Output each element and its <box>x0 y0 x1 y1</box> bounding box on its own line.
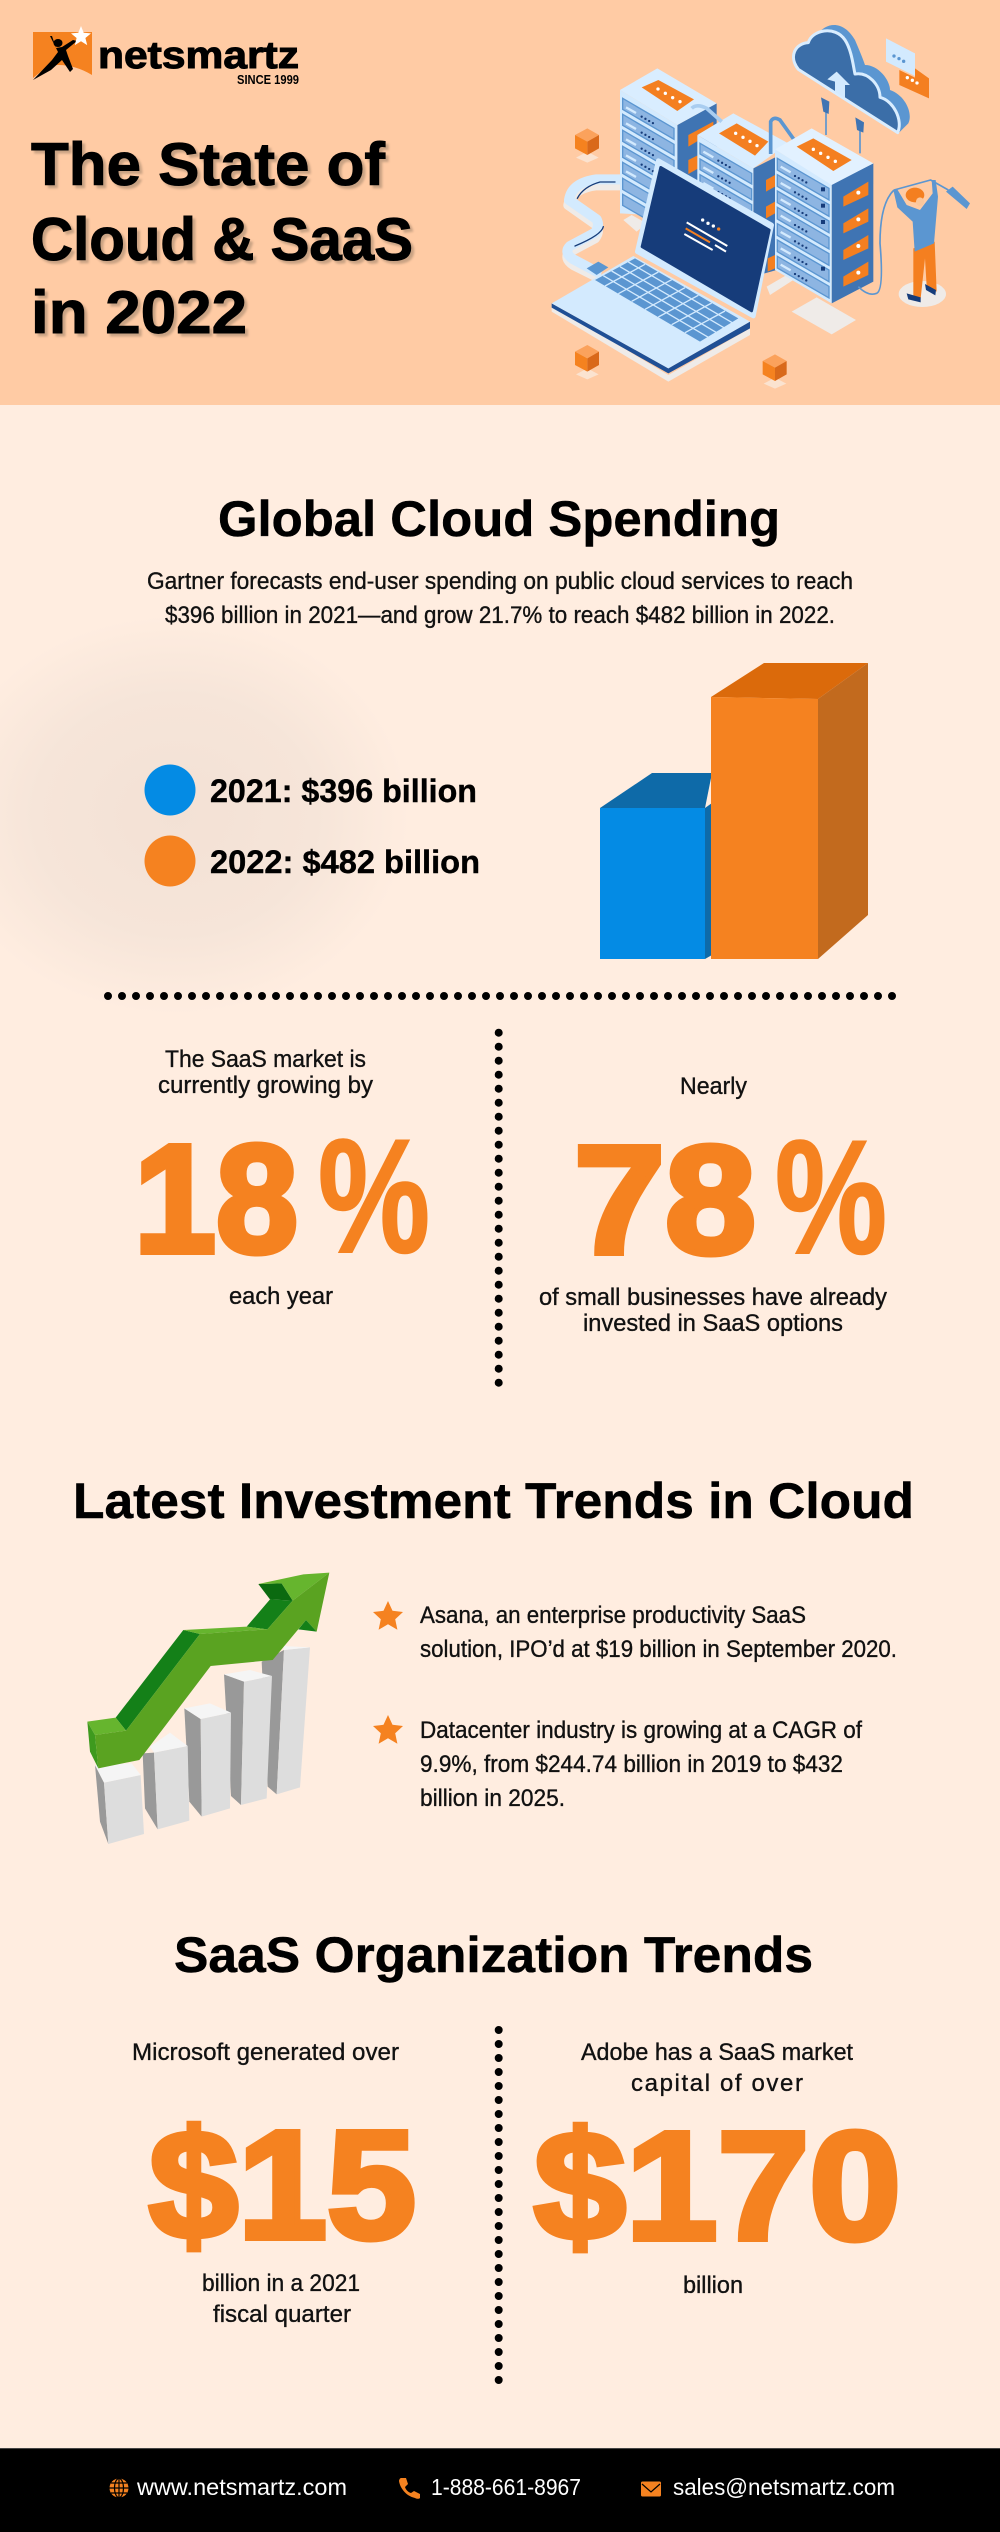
stat: 18 percent growth: currently growing by <box>158 1072 373 1099</box>
text: gartner forecast: Gartner forecasts end-user spending on public cloud services to reach <box>147 568 853 595</box>
stat: adobe <box>534 2039 901 2299</box>
technician with cable <box>858 180 970 302</box>
stat: 78 percent small businesses <box>539 1073 887 1337</box>
bullet: asana <box>373 1601 897 1663</box>
server rack: front <box>775 128 873 303</box>
stat: 18 percent growth <box>134 1046 430 1310</box>
panel: saas statistics <box>134 1033 887 1384</box>
stat: adobe: $170 <box>534 2100 901 2272</box>
contact: email: sales@netsmartz.com <box>673 2474 895 2500</box>
legend: spending by year <box>144 764 480 886</box>
legend: spending by year: 2022: $482 billion <box>210 844 480 880</box>
title: in 2022 <box>31 279 247 346</box>
text: gartner forecast: $396 billion in 2021—and grow 21.7% to reach $482 billion in 2022. <box>165 602 835 629</box>
bullet: datacenter <box>373 1715 862 1812</box>
stat: microsoft <box>132 2039 416 2328</box>
server rack: back left <box>620 68 717 219</box>
stat: 78 percent small businesses: invested in SaaS options <box>583 1310 843 1337</box>
stat: microsoft: billion in a 2021 <box>202 2270 360 2297</box>
bullet: asana: Asana, an enterprise productivity SaaS <box>420 1602 806 1629</box>
title <box>31 131 413 346</box>
icon: cubes <box>575 128 787 389</box>
stat: 18 percent growth: 18 <box>134 1113 298 1285</box>
panel: saas organization trends <box>132 1927 901 2381</box>
server rack: middle <box>697 113 788 277</box>
heading: saas organization trends: SaaS Organization Trends <box>174 1927 813 1983</box>
bar chart: 3d spending bars <box>600 663 868 959</box>
title: The State of <box>31 131 386 198</box>
chart icon: rising green arrow over bars <box>87 1573 329 1844</box>
heading: global cloud spending: Global Cloud Spending <box>218 491 780 547</box>
logo: SINCE 1999 <box>237 72 299 87</box>
stat: 18 percent growth: each year <box>229 1283 333 1310</box>
heading: latest investment trends: Latest Investment Trends in Cloud <box>73 1473 914 1529</box>
stat: adobe: Adobe has a SaaS market <box>581 2039 853 2066</box>
stat: 78 percent small businesses: % <box>775 1107 887 1288</box>
legend: spending by year: 2021: $396 billion <box>210 773 477 809</box>
stat: microsoft: fiscal quarter <box>213 2301 351 2328</box>
stat: microsoft: Microsoft generated over <box>132 2039 399 2066</box>
cable: left <box>567 179 620 277</box>
stat: 18 percent growth: % <box>318 1106 430 1287</box>
background glow <box>0 615 410 1015</box>
cables: rack links <box>692 106 797 154</box>
stat: adobe: billion <box>683 2272 743 2299</box>
bullet: datacenter: billion in 2025. <box>420 1785 565 1812</box>
logo: netsmartz <box>98 35 299 77</box>
panel: latest investment trends <box>73 1473 914 1844</box>
title: Cloud & SaaS <box>31 206 413 273</box>
contact: phone: 1-888-661-8967 <box>431 2474 581 2500</box>
illustration: cloud servers and laptop <box>552 25 970 389</box>
icon: cloud <box>794 25 910 153</box>
stat: 18 percent growth: The SaaS market is <box>165 1046 366 1073</box>
panel: global cloud spending <box>0 491 868 1015</box>
stat: adobe: capital of over <box>631 2070 803 2097</box>
logo <box>33 26 299 87</box>
panel: header <box>0 0 1000 405</box>
bullet: datacenter: Datacenter industry is growing at a CAGR of <box>420 1717 862 1744</box>
bullet: datacenter: 9.9%, from $244.74 billion in 2019 to $432 <box>420 1751 843 1778</box>
footer <box>0 2448 1000 2532</box>
floor shadows <box>552 215 946 382</box>
contact: website: www.netsmartz.com <box>136 2474 347 2500</box>
stat: 78 percent small businesses: of small businesses have already <box>539 1284 887 1311</box>
stat: 78 percent small businesses: 78 <box>574 1114 756 1286</box>
stat: 78 percent small businesses: Nearly <box>680 1073 747 1100</box>
laptop <box>552 161 772 373</box>
bullet: asana: solution, IPO’d at $19 billion in September 2020. <box>420 1636 897 1663</box>
text: gartner forecast <box>147 568 853 629</box>
stat: microsoft: $15 <box>149 2099 416 2271</box>
icon: chat bubbles <box>886 38 929 98</box>
